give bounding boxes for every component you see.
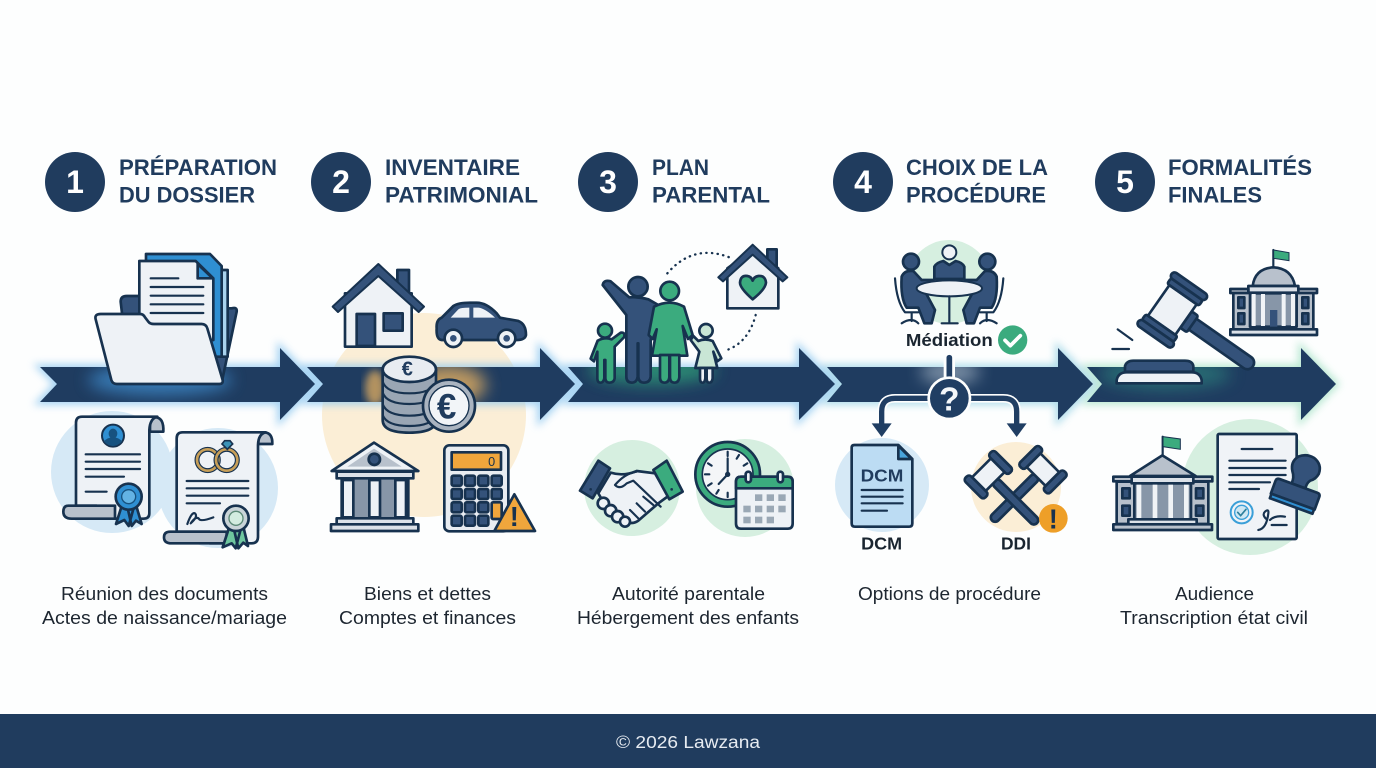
step 4 heading — [833, 152, 1048, 212]
icon: car — [437, 303, 526, 347]
icon: mediation table — [895, 245, 1003, 323]
green glow under family — [588, 356, 716, 384]
DDI label: DDI — [1001, 533, 1031, 553]
icon: dotted path to home — [667, 253, 756, 351]
icon: calculator with warning: 0 — [488, 455, 495, 469]
tinted circles behind certificates — [51, 411, 278, 548]
caption step 2: Comptes et finances — [339, 608, 516, 628]
caption step 2 — [339, 584, 516, 628]
tinted circles for procedure options — [835, 240, 1061, 532]
icon: stamp — [1269, 448, 1331, 514]
icon: marriage certificate — [164, 432, 272, 548]
icon: gavel — [1112, 271, 1272, 393]
caption step 3 — [577, 584, 799, 628]
icon: calendar — [736, 472, 793, 529]
panel: step 1 icons — [95, 254, 237, 384]
step 5 heading: FINALES — [1168, 182, 1262, 208]
arrow 5 — [1087, 348, 1336, 420]
icon: green check — [998, 325, 1027, 355]
panel: step 2 icons — [331, 264, 535, 532]
icon: folder with papers — [95, 254, 237, 384]
caption step 4: Options de procédure — [858, 584, 1041, 604]
step 5 heading — [1095, 152, 1312, 212]
step 1 heading: PRÉPARATION — [119, 155, 277, 180]
step headers — [45, 152, 1312, 212]
step 1 heading: 1 — [66, 164, 84, 200]
icon: signed document — [1218, 434, 1297, 539]
tinted circle behind patrimony icons — [322, 313, 526, 517]
caption step 1 — [42, 584, 287, 628]
icon: handshake — [580, 461, 683, 527]
icon: coin stack: € — [402, 359, 413, 381]
caption step 5 — [1120, 584, 1308, 628]
caption step 2: Biens et dettes — [364, 584, 491, 604]
footer: © 2026 Lawzana — [616, 732, 760, 752]
icon: DCM document: DCM — [861, 466, 903, 486]
step 2 heading — [311, 152, 538, 212]
panel: step 5 icons — [1112, 250, 1331, 539]
caption step 1: Actes de naissance/mariage — [42, 608, 287, 628]
icon: orange alert — [1039, 503, 1068, 534]
panel: step 4 icons — [852, 245, 1068, 553]
gold glow around coins — [365, 365, 486, 406]
green glow under gavel — [1099, 359, 1231, 389]
arrow glow — [40, 348, 1336, 420]
step 2 heading: PATRIMONIAL — [385, 182, 538, 208]
icon: house — [333, 264, 424, 347]
arrow 2 — [307, 348, 575, 420]
step 3 heading: PARENTAL — [652, 182, 770, 208]
arrow 1 — [40, 348, 315, 420]
decision connector: ? — [939, 382, 960, 419]
tinted circles behind agreement icons — [584, 439, 794, 537]
captions — [42, 584, 1308, 628]
icon: clock — [695, 442, 760, 507]
icon: home with heart — [718, 245, 787, 308]
icon: orange alert: ! — [1049, 503, 1058, 534]
icon: calculator with warning: ! — [510, 501, 519, 532]
step 4 heading: PROCÉDURE — [906, 182, 1046, 208]
panel: step 3 icons — [591, 245, 787, 383]
tinted circle behind signed document — [1182, 419, 1318, 555]
step 5 heading: 5 — [1116, 164, 1134, 200]
glow around decision node — [920, 360, 980, 384]
step 3 heading: 3 — [599, 164, 617, 200]
caption step 3: Hébergement des enfants — [577, 608, 799, 628]
step 2 heading: INVENTAIRE — [385, 155, 520, 180]
caption step 1: Réunion des documents — [61, 584, 268, 604]
icon: coin stack — [383, 357, 436, 433]
step 5 heading: FORMALITÉS — [1168, 155, 1312, 180]
step 3 heading: PLAN — [652, 155, 709, 180]
DCM label: DCM — [861, 533, 902, 553]
arrow 3 — [568, 348, 835, 420]
caption step 5: Audience — [1175, 584, 1254, 604]
icon: calculator with warning — [444, 445, 535, 532]
icons: agreement and schedule — [580, 442, 793, 529]
step 1 heading — [45, 152, 277, 212]
icon: courthouse with dome — [1230, 250, 1317, 335]
icon: euro coin: € — [437, 387, 456, 426]
arrow 4 — [827, 348, 1093, 420]
icon: courthouse with flag — [1113, 437, 1212, 530]
caption step 5: Transcription état civil — [1120, 608, 1308, 628]
step 2 heading: 2 — [332, 164, 350, 200]
caption step 3: Autorité parentale — [612, 584, 765, 604]
process arrows — [40, 348, 1336, 420]
step 4 heading: 4 — [854, 164, 872, 200]
icon: certificates — [63, 417, 272, 548]
icon: bank — [331, 443, 418, 531]
mediation label: Médiation — [906, 330, 993, 350]
icon: family — [591, 277, 721, 383]
icon: DCM document — [852, 445, 912, 527]
footer — [0, 714, 1376, 768]
step 4 heading: CHOIX DE LA — [906, 155, 1048, 180]
blue glow under folder — [88, 365, 232, 395]
decision connector — [872, 358, 1027, 437]
icon: birth certificate — [63, 417, 163, 526]
step 3 heading — [578, 152, 770, 212]
icon: crossed gavels — [963, 445, 1068, 538]
step 1 heading: DU DOSSIER — [119, 182, 255, 208]
icon: euro coin — [423, 380, 475, 432]
